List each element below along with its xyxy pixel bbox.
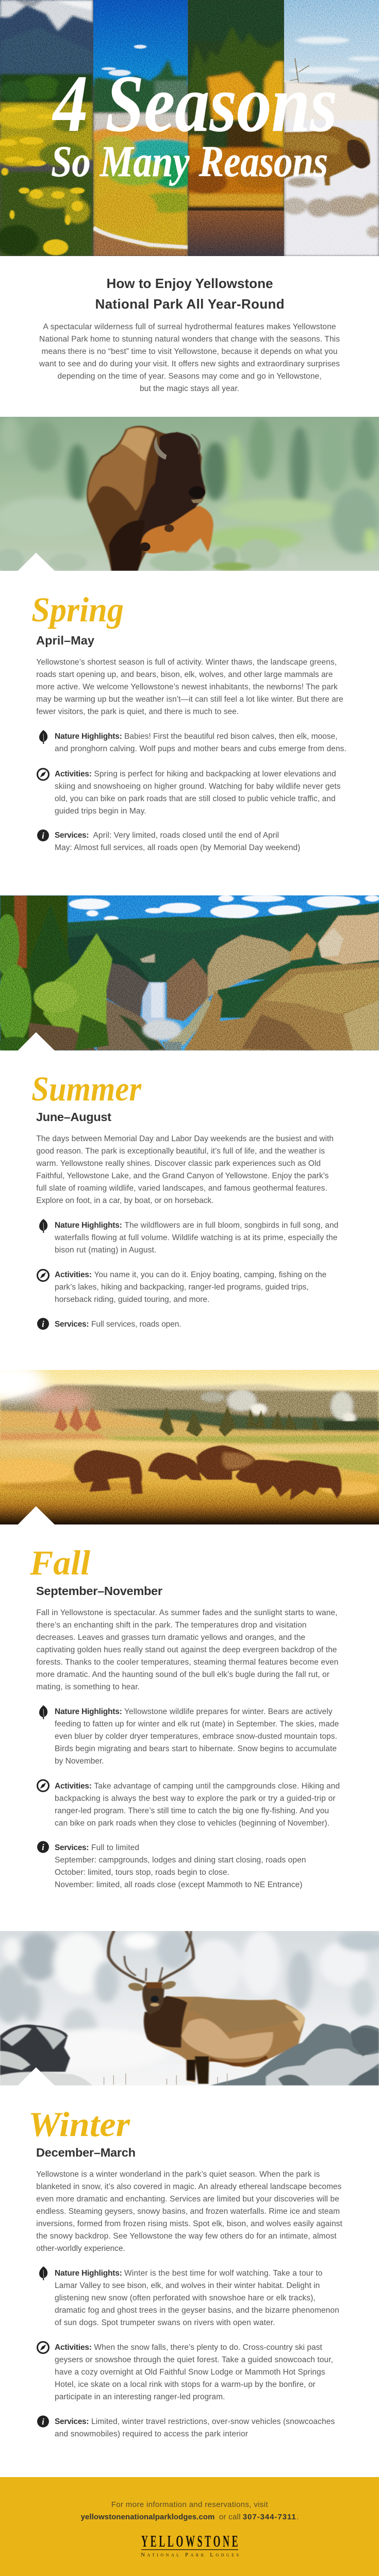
photo: bison herd at sunset	[0, 1370, 379, 1524]
season description: blanketed in snow, it’s also covered in magic. An already ethereal landscape becomes	[36, 2182, 342, 2191]
services: Limited, winter travel restrictions, over-snow vehicles (snowcoaches	[91, 2417, 335, 2426]
intro paragraph: but the magic stays all year.	[140, 384, 239, 393]
season description: captivating golden hues really stand out against the deep evergreen backdrop of the	[36, 1646, 337, 1654]
icon: compass	[37, 1780, 48, 1791]
activities: You name it, you can do it. Enjoy boating, camping, fishing on the	[94, 1270, 326, 1279]
nature highlights	[39, 1219, 338, 1255]
activities: have a cozy overnight at Old Faithful Snow Lodge or Mammoth Hot Springs	[55, 2368, 325, 2377]
season dates: September–November	[36, 1584, 162, 1598]
season dates: April–May	[36, 634, 94, 647]
nature highlights: dramatic fog and ghost trees in the geyser basins, and the bizarre phenomenon	[55, 2306, 339, 2315]
spring column	[0, 0, 93, 256]
season description: fewer visitors, the park is quiet, and there is much to see.	[36, 707, 239, 716]
nature highlights: The wildflowers are in full bloom, songbirds in full song, and	[124, 1221, 338, 1230]
season title: summer: Summer	[31, 1069, 141, 1108]
season description: roads start opening up, and bears, bison, elk, wolves, and other large mammals are	[36, 670, 333, 679]
photo strip: four seasons	[0, 0, 379, 256]
nature highlights	[39, 2266, 339, 2327]
season title: spring: Spring	[31, 590, 124, 629]
nature highlights: Nature Highlights:	[55, 732, 122, 741]
season description: may be warming up but the weather isn’t—it can still feel a lot like winter. But there are	[36, 695, 343, 704]
footer call to action: .	[296, 2513, 299, 2521]
nature highlights	[39, 1705, 339, 1766]
season description: Yellowstone’s shortest season is full of activity. Winter thaws, the landscape greens,	[36, 658, 337, 667]
fall column	[188, 0, 284, 256]
intro heading: National Park All Year-Round	[95, 296, 285, 312]
season description: The days between Memorial Day and Labor Day weekends are the busiest and with	[36, 1134, 334, 1143]
nature highlights: Nature Highlights:	[55, 2269, 122, 2278]
icon: info	[37, 829, 49, 841]
services: April: Very limited, roads closed until the end of April	[93, 831, 279, 840]
activities: Activities:	[55, 2343, 92, 2352]
photo: bull elk in snow	[0, 1931, 379, 2086]
season description: endless. Steaming geysers, snowy basins, and frozen waterfalls. Rime ice and steam	[36, 2207, 340, 2216]
icon: compass	[37, 769, 48, 780]
panel: winter	[0, 1930, 379, 2438]
footer call to action: 307-344-7311	[243, 2513, 296, 2521]
intro paragraph: A spectacular wilderness full of surreal hydrothermal features makes Yellowstone	[43, 323, 336, 331]
services: and snowmobiles) required to access the park interior	[55, 2430, 248, 2438]
nature highlights: and pronghorn calving. Wolf pups and mother bears and cubs emerge from dens.	[55, 744, 347, 753]
intro paragraph	[39, 323, 340, 393]
season description: forests. Thanks to the cooler temperatures, steaming thermal features become even	[36, 1658, 338, 1667]
icon: leaf	[39, 2266, 47, 2280]
intro paragraph: National Park home to stunning natural wonders that change with the seasons. This	[39, 335, 340, 344]
icon: info	[37, 1841, 49, 1853]
nature highlights: glistening new snow (often perforated with snowshoe hare or elk tracks),	[55, 2294, 316, 2302]
season description	[36, 658, 343, 716]
activities	[37, 2342, 333, 2401]
activities: old, you can bike on park roads that are still closed to public vehicle traffic, and	[55, 794, 336, 803]
activities: Hotel, ice skate on a local rink with stops for a warm-up by the bonfire, or	[55, 2380, 316, 2389]
nature highlights: of sun dogs. Spot trumpeter swans on rivers with open water.	[55, 2318, 275, 2327]
icon: leaf	[39, 730, 47, 744]
season description: Yellowstone is a winter wonderland in the park’s quiet season. When the park is	[36, 2170, 320, 2179]
icon: info: i	[42, 2417, 44, 2427]
activities: guided trips begin in May.	[55, 807, 146, 816]
icon: info: i	[42, 1842, 44, 1852]
services: October: limited, tours stop, roads begin to close.	[55, 1868, 229, 1877]
nature highlights: Birds begin migrating and bears start to hibernate. Snow begins to accumulate	[55, 1744, 337, 1753]
footer band	[0, 2477, 379, 2576]
activities: horseback riding, guided touring, and more.	[55, 1295, 209, 1304]
photo: canyon and waterfall	[0, 895, 379, 1050]
logo: Yellowstone National Park Lodges: YELLOWSTONE	[141, 2532, 238, 2550]
icon: info	[37, 1318, 49, 1330]
panel: fall	[0, 1363, 379, 1889]
season title: fall: Fall	[29, 1543, 90, 1582]
services	[37, 1841, 306, 1889]
services	[37, 1318, 182, 1330]
season description: mating, is something to hear.	[36, 1683, 140, 1691]
activities: Activities:	[55, 1782, 92, 1791]
season description: the snowy backdrop. See Yellowstone the way few others do for an intimate, almost	[36, 2232, 337, 2241]
season description: even more dramatic and enchanting. Services are limited but your discoveries will be	[36, 2195, 339, 2204]
season dates: June–August	[36, 1110, 111, 1124]
activities: skiing and snowshoeing on higher ground. Watching for baby wildlife never gets	[55, 782, 341, 791]
activities	[37, 1269, 326, 1304]
season description: decreases. Leaves and grasses turn dramatic yellows and oranges, and the	[36, 1633, 305, 1642]
pointer notch	[18, 553, 55, 571]
pointer notch	[18, 1032, 55, 1050]
services: Full services, roads open.	[91, 1320, 182, 1329]
nature highlights: Babies! First the beautiful red bison calves, then elk, moose,	[124, 732, 337, 741]
season description: other-worldly experience.	[36, 2244, 125, 2253]
season description: inversions, formed from frozen rising mists. Spot elk, bison, and wolves easily against	[36, 2219, 342, 2228]
services: Services:	[55, 831, 89, 840]
activities: park’s lakes, hiking and backpacking, ranger-led programs, guided trips,	[55, 1283, 309, 1292]
season description: warm. Yellowstone really shines. Discover classic park experiences such as Old	[36, 1159, 321, 1168]
panel: spring	[0, 416, 379, 852]
icon: info: i	[42, 1319, 44, 1329]
services: September: campgrounds, lodges and dining start closing, roads open	[55, 1856, 306, 1865]
services: Services:	[55, 1320, 89, 1329]
footer call to action: For more information and reservations, visit	[111, 2500, 268, 2509]
activities	[37, 769, 341, 816]
nature highlights: Lamar Valley to see bison, elk, and wolves in their winter habitat. Delight in	[55, 2281, 320, 2290]
season title: winter: Winter	[28, 2105, 130, 2144]
activities: When the snow falls, there’s plenty to do. Cross-country ski past	[94, 2343, 322, 2352]
services	[37, 2415, 335, 2438]
icon: compass	[37, 2342, 48, 2353]
pointer notch	[18, 2067, 55, 2086]
nature highlights	[39, 730, 347, 753]
intro paragraph: depending on the time of year. Seasons may come and go in Yellowstone,	[58, 372, 322, 381]
icon: compass	[37, 1269, 48, 1281]
main title: 4 Seasons	[52, 59, 337, 149]
season description: good reason. The park is exceptionally beautiful, it’s full of life, and the weather is	[36, 1147, 325, 1156]
nature highlights: Nature Highlights:	[55, 1221, 122, 1230]
season description: more active. We welcome Yellowstone’s newest inhabitants, the newborns! The park	[36, 683, 338, 691]
intro section	[39, 276, 340, 393]
intro heading	[95, 276, 285, 312]
nature highlights: Winter is the best time for wolf watching. Take a tour to	[124, 2269, 322, 2278]
nature highlights: Yellowstone wildlife prepares for winter. Bears are actively	[124, 1707, 333, 1716]
services: November: limited, all roads close (except Mammoth to NE Entrance)	[55, 1880, 302, 1889]
pointer notch	[18, 1506, 55, 1524]
season dates: December–March	[36, 2146, 136, 2159]
activities: Spring is perfect for hiking and backpacking at lower elevations and	[94, 770, 336, 778]
services	[37, 829, 300, 852]
footer call to action	[81, 2500, 299, 2521]
activities: Activities:	[55, 1270, 92, 1279]
hero banner	[0, 0, 379, 256]
intro paragraph: want to see and do during your visit. It offers new sights and extraordinary surprises	[39, 360, 340, 368]
panel: summer	[0, 895, 379, 1330]
icon: info	[37, 2415, 49, 2428]
season description: full slate of roaming wildlife, varied landscapes, and famous geothermal features.	[36, 1184, 327, 1193]
nature highlights: bison rut (mating) in August.	[55, 1246, 156, 1255]
season description: Faithful, Yellowstone Lake, and the Grand Canyon of Yellowstone. Enjoy the park’s	[36, 1172, 329, 1180]
icon: info: i	[42, 831, 44, 841]
services: Services:	[55, 2417, 89, 2426]
photo: bison and calf	[0, 417, 379, 571]
icon: leaf	[39, 1219, 47, 1233]
season description: more dramatic. And the haunting sound of the bull elk’s bugle during the fall rut, or	[36, 1670, 329, 1679]
activities: backpacking is always the best way to explore the park or try a guided-trip or	[55, 1794, 336, 1803]
season description	[36, 1608, 338, 1691]
activities: can bike on park roads when they close to vehicles (beginning of November).	[55, 1819, 329, 1828]
season description	[36, 2170, 342, 2253]
services: Full to limited	[91, 1843, 139, 1852]
season description: there’s an enchanting shift in the park. The temperatures drop and visitation	[36, 1621, 306, 1630]
season description: Explore on foot, in a car, by boat, or on horseback.	[36, 1196, 213, 1205]
season description: Fall in Yellowstone is spectacular. As summer fades and the sunlight starts to wane,	[36, 1608, 337, 1617]
activities: Activities:	[55, 770, 92, 778]
nature highlights: Nature Highlights:	[55, 1707, 122, 1716]
activities: Take advantage of camping until the campgrounds close. Hiking and	[94, 1782, 340, 1791]
nature highlights: waterfalls flowing at full volume. Wildlife watching is at its prime, especially the	[54, 1233, 337, 1242]
intro paragraph: means there is no “best” time to visit Yellowstone, because it depends on what you	[41, 347, 337, 356]
services: Services:	[55, 1843, 89, 1852]
activities: participate in an interesting ranger-led program.	[55, 2393, 225, 2401]
subtitle: So Many Reasons	[51, 137, 328, 186]
logo: Yellowstone National Park Lodges: National Park Lodges	[141, 2552, 239, 2558]
footer call to action: yellowstonenationalparklodges.com	[81, 2513, 215, 2521]
icon: leaf	[39, 1705, 47, 1719]
activities: geysers or snowshoe through the quiet forest. Take a guided snowcoach tour,	[55, 2355, 333, 2364]
season description	[36, 1134, 334, 1205]
nature highlights: even bluer by colder dryer temperatures, embrace snow-dusted mountain tops.	[55, 1732, 337, 1741]
activities	[37, 1780, 340, 1828]
activities: ranger-led program. There’s still time to catch the big one fly-fishing. And you	[55, 1806, 329, 1816]
nature highlights: by November.	[55, 1757, 104, 1766]
winter column	[284, 0, 379, 256]
footer call to action: or call	[219, 2513, 240, 2521]
intro heading: How to Enjoy Yellowstone	[106, 276, 273, 291]
summer column	[93, 0, 188, 256]
services: May: Almost full services, all roads open (by Memorial Day weekend)	[55, 843, 300, 852]
nature highlights: feeding to fatten up for winter and elk rut (mate) in September. The skies, made	[55, 1720, 339, 1728]
